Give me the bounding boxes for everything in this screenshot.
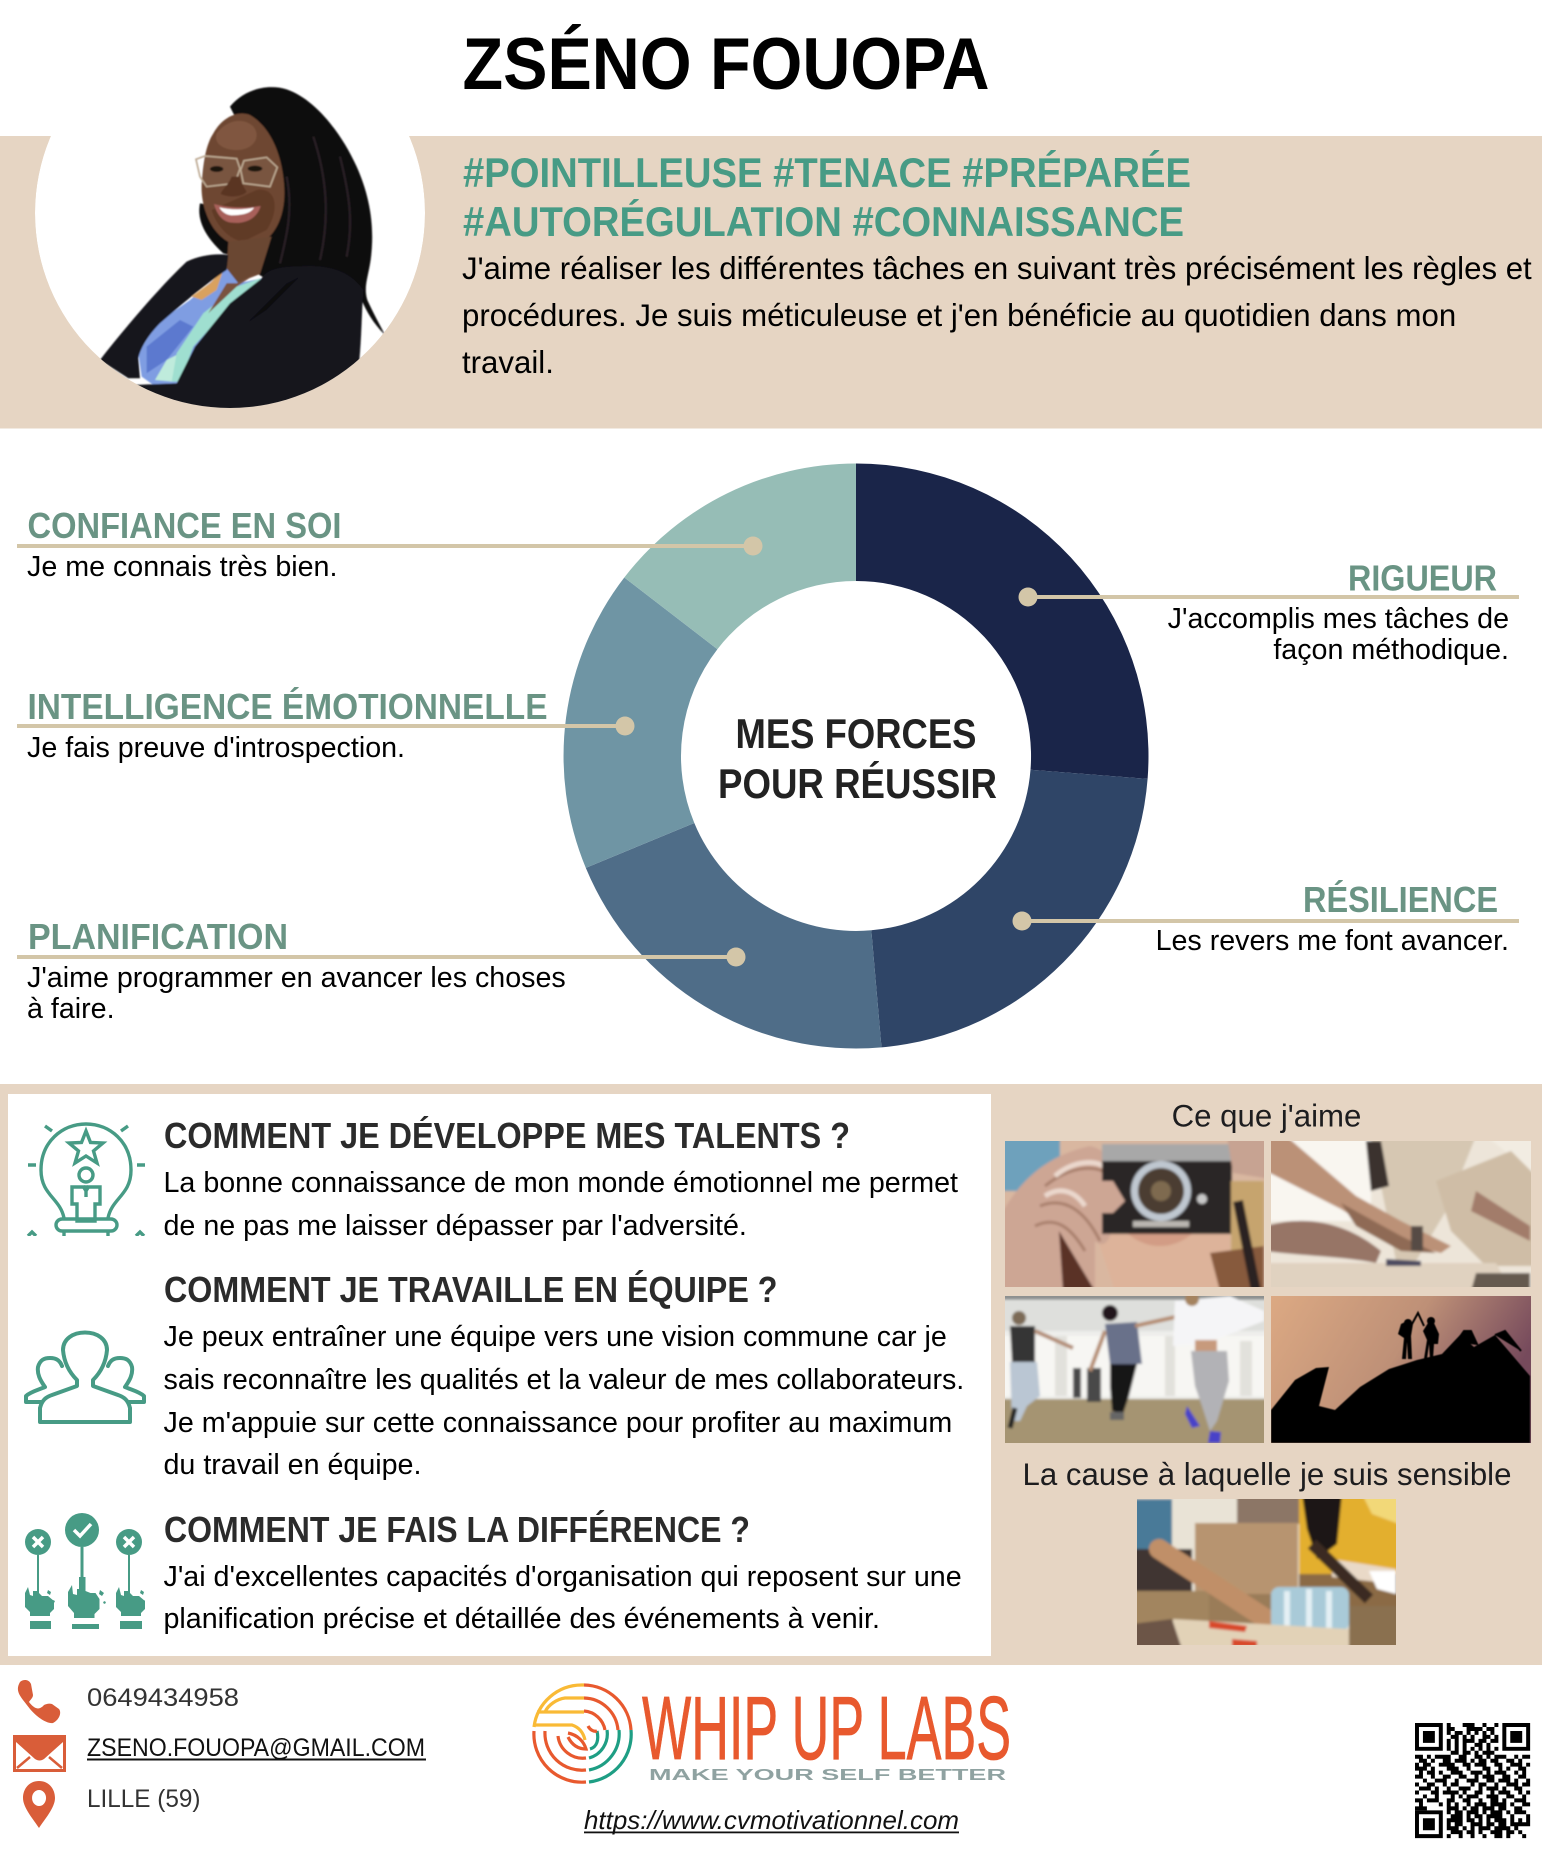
callout: confiance en soi [17, 505, 762, 583]
callout: resilience: RÉSILIENCE [1303, 879, 1498, 920]
profile description: J'aime réaliser les différentes tâches en suivant très précisément les règles et [462, 251, 1532, 286]
donut chart: mes forces [564, 464, 1148, 1049]
profile description: procédures. Je suis méticuleuse et j'en bénéficie au quotidien dans mon [462, 298, 1456, 333]
photo: camera [1005, 1141, 1264, 1287]
text: email: ZSENO.FOUOPA@GMAIL.COM [87, 1734, 425, 1762]
heading: equipe: COMMENT JE TRAVAILLE EN ÉQUIPE ? [164, 1269, 778, 1310]
text: talents: La bonne connaissance de mon monde émotionnel me permet [164, 1167, 958, 1199]
text: difference [164, 1561, 962, 1635]
callout: planification: J'aime programmer en avancer les choses [27, 962, 566, 994]
logo: Whip Up Labs [534, 1679, 1011, 1784]
icon: location pin [23, 1781, 55, 1828]
text: location: LILLE (59) [87, 1785, 200, 1813]
hashtags: #POINTILLEUSE #TENACE #PRÉPARÉE [463, 149, 1191, 196]
callout: planification [17, 916, 746, 1025]
callout: planification: à faire. [27, 993, 115, 1025]
icon: hands pressing choice buttons [25, 1513, 145, 1629]
portrait photo [35, 86, 425, 408]
logo: Whip Up Labs: WHIP UP LABS [642, 1679, 1011, 1779]
heading: ce que j'aime: Ce que j'aime [1172, 1098, 1361, 1134]
icon: light bulb with star and person [28, 1124, 145, 1240]
hashtags [463, 149, 1191, 245]
profile description: travail. [462, 345, 554, 380]
text: equipe [164, 1321, 964, 1481]
photo: sewing machine [1271, 1141, 1531, 1287]
callout: rigueur [1018, 558, 1519, 666]
hashtags: #AUTORÉGULATION #CONNAISSANCE [463, 198, 1184, 245]
heading: la cause: La cause à laquelle je suis sensible [1023, 1457, 1511, 1492]
text: difference: J'ai d'excellentes capacités d'organisation qui reposent sur une [164, 1561, 962, 1593]
callout: intelligence emotionnelle [17, 686, 634, 764]
text: talents [164, 1167, 958, 1242]
callout: planification: PLANIFICATION [28, 916, 288, 957]
callout: rigueur: façon méthodique. [1273, 634, 1509, 666]
photo: dancers [1005, 1296, 1264, 1443]
callout: intelligence emotionnelle: INTELLIGENCE ÉMOTIONNELLE [28, 686, 548, 727]
photo: silhouettes on a summit [1271, 1296, 1531, 1443]
text: equipe: du travail en équipe. [164, 1449, 421, 1481]
logo: Whip Up Labs: MAKE YOUR SELF BETTER [649, 1767, 1007, 1784]
panel: profile band [0, 136, 1542, 428]
text: talents: de ne pas me laisser dépasser par l'adversité. [164, 1210, 747, 1242]
text: equipe: Je m'appuie sur cette connaissance pour profiter au maximum [164, 1407, 952, 1439]
profile description [462, 251, 1532, 380]
callout: resilience: Les revers me font avancer. [1156, 925, 1509, 957]
callout: rigueur: J'accomplis mes tâches de [1168, 603, 1509, 635]
QR code [1415, 1723, 1530, 1838]
text: phone number: 0649434958 [87, 1684, 239, 1712]
donut center title: POUR RÉUSSIR [718, 760, 997, 807]
callout: rigueur: RIGUEUR [1348, 558, 1497, 598]
icon: team of three people [26, 1332, 144, 1422]
donut center title: MES FORCES [736, 710, 976, 757]
panel: lower beige section [0, 1084, 1542, 1665]
callout: confiance en soi: Je me connais très bien. [27, 551, 337, 583]
photo: donation boxes [1137, 1499, 1396, 1645]
callout: confiance en soi: CONFIANCE EN SOI [28, 505, 342, 546]
callout: resilience [1012, 879, 1519, 957]
text: equipe: Je peux entraîner une équipe vers une vision commune car je [164, 1321, 947, 1353]
callout: intelligence emotionnelle: Je fais preuve d'introspection. [27, 732, 405, 764]
icon: envelope [13, 1735, 66, 1772]
title: ZSÉNO FOUOPA [462, 24, 990, 105]
panel: talents white card [8, 1094, 991, 1656]
link: website: https://www.cvmotivationnel.com [584, 1807, 959, 1835]
text: equipe: sais reconnaître les qualités et la valeur de mes collaborateurs. [164, 1364, 964, 1396]
heading: talents: COMMENT JE DÉVELOPPE MES TALENTS ? [164, 1115, 850, 1156]
heading: difference: COMMENT JE FAIS LA DIFFÉRENCE ? [164, 1509, 750, 1550]
text: difference: planification précise et détaillée des événements à venir. [164, 1603, 880, 1635]
donut center title [718, 710, 997, 807]
icon: phone [18, 1680, 60, 1723]
